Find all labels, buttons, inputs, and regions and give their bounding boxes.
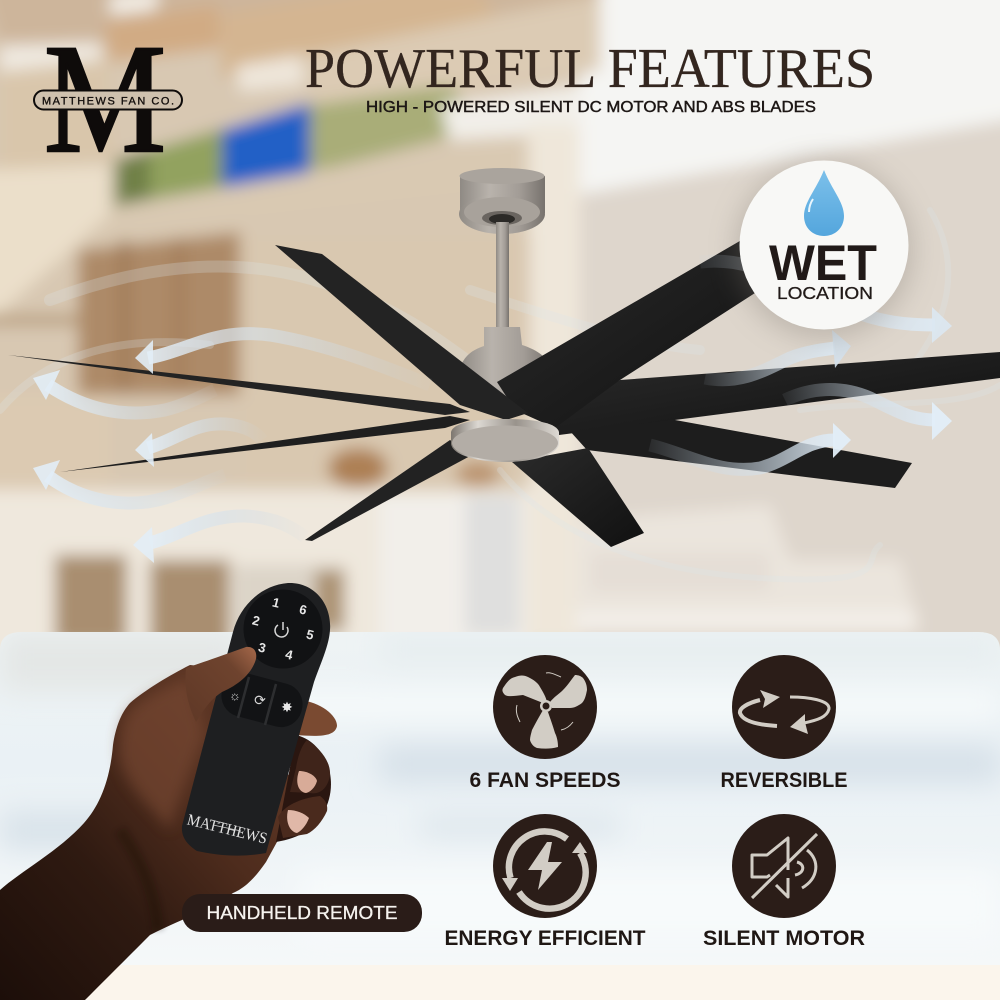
blade: bottom left xyxy=(305,440,472,541)
panel: features xyxy=(0,632,1000,965)
remote dial numbers: 5 xyxy=(305,626,315,643)
label: SILENT MOTOR xyxy=(703,927,865,950)
icon: water drop xyxy=(804,170,844,236)
feature: 6 fan speeds xyxy=(470,655,620,792)
arrow left 2 xyxy=(33,370,215,413)
icon: rotation arrows xyxy=(740,690,829,734)
motor hub xyxy=(451,419,559,462)
remote dial numbers: 3 xyxy=(257,639,267,656)
feature: reversible xyxy=(720,655,848,792)
arrow left 3 xyxy=(135,424,262,467)
icon: energy cycle xyxy=(502,831,587,909)
arrow right 3 xyxy=(785,390,952,440)
remote brand text: MATTHEWS xyxy=(185,811,269,848)
fan canopy xyxy=(459,168,545,234)
thumb xyxy=(185,647,256,722)
feature: silent motor xyxy=(703,814,865,950)
hand holding remote xyxy=(0,583,337,1000)
label: 6 FAN SPEEDS xyxy=(470,769,620,792)
badge text: location: LOCATION xyxy=(777,283,873,303)
faint air swoosh trails xyxy=(0,210,1000,579)
blade: upper left xyxy=(275,245,528,420)
blade: bottom right xyxy=(512,448,644,547)
icon: fan xyxy=(502,675,587,749)
blade: upper right xyxy=(497,238,770,428)
airflow arrows: left xyxy=(33,334,430,563)
logo name pill xyxy=(34,90,182,110)
remote dial xyxy=(244,590,322,668)
label: ENERGY EFFICIENT xyxy=(444,927,646,950)
blurred room background xyxy=(0,0,1000,648)
bottom strip xyxy=(0,960,1000,1000)
arrow right 2 xyxy=(705,330,851,380)
fingers xyxy=(276,700,337,842)
remote button row: ☼ xyxy=(229,688,241,703)
logo name pill: MATTHEWS FAN CO. xyxy=(42,96,174,108)
title: POWERFUL FEATURES xyxy=(305,38,875,100)
logo monogram: M xyxy=(44,12,166,185)
arrow right 1 xyxy=(700,261,952,343)
remote dial numbers: 2 xyxy=(251,612,261,629)
remote button row: ⟳ xyxy=(254,692,266,708)
pill: handheld remote: HANDHELD REMOTE xyxy=(206,902,398,923)
label: REVERSIBLE xyxy=(720,769,848,792)
hand back highlight xyxy=(119,678,205,830)
badge: wet location xyxy=(736,160,912,338)
badge text: wet: WET xyxy=(769,235,877,291)
pill: handheld remote xyxy=(182,894,422,932)
remote control xyxy=(182,583,330,856)
hand and arm xyxy=(0,665,300,1000)
blade: far right xyxy=(545,352,1000,435)
remote dial numbers: 4 xyxy=(284,646,295,663)
blade: lower right xyxy=(560,420,912,488)
wrist shading xyxy=(120,830,158,930)
arrow left 5 xyxy=(133,516,305,563)
icon: muted speaker xyxy=(752,834,817,898)
remote power button xyxy=(275,622,288,637)
remote dial numbers: 1 xyxy=(271,594,281,611)
remote dial numbers xyxy=(251,594,315,663)
icon: fan motion marks xyxy=(516,673,573,730)
airflow arrows: right xyxy=(650,261,952,469)
motor housing xyxy=(460,327,551,400)
fan downrod xyxy=(496,222,509,332)
arrow right 4 xyxy=(650,423,851,469)
arrow left 1 xyxy=(135,334,430,385)
remote dial numbers: 6 xyxy=(298,601,308,618)
arrow left 4 xyxy=(33,460,225,503)
feature: energy efficient xyxy=(444,814,646,950)
blade: thin left lower xyxy=(60,416,470,472)
remote button row: ✸ xyxy=(281,699,293,715)
blade: thin left upper xyxy=(8,355,470,415)
ceiling fan xyxy=(8,168,1000,547)
remote button row xyxy=(217,668,307,732)
logo: Matthews Fan Co. xyxy=(34,12,182,185)
subtitle: HIGH - POWERED SILENT DC MOTOR AND ABS BLADES xyxy=(366,99,816,116)
